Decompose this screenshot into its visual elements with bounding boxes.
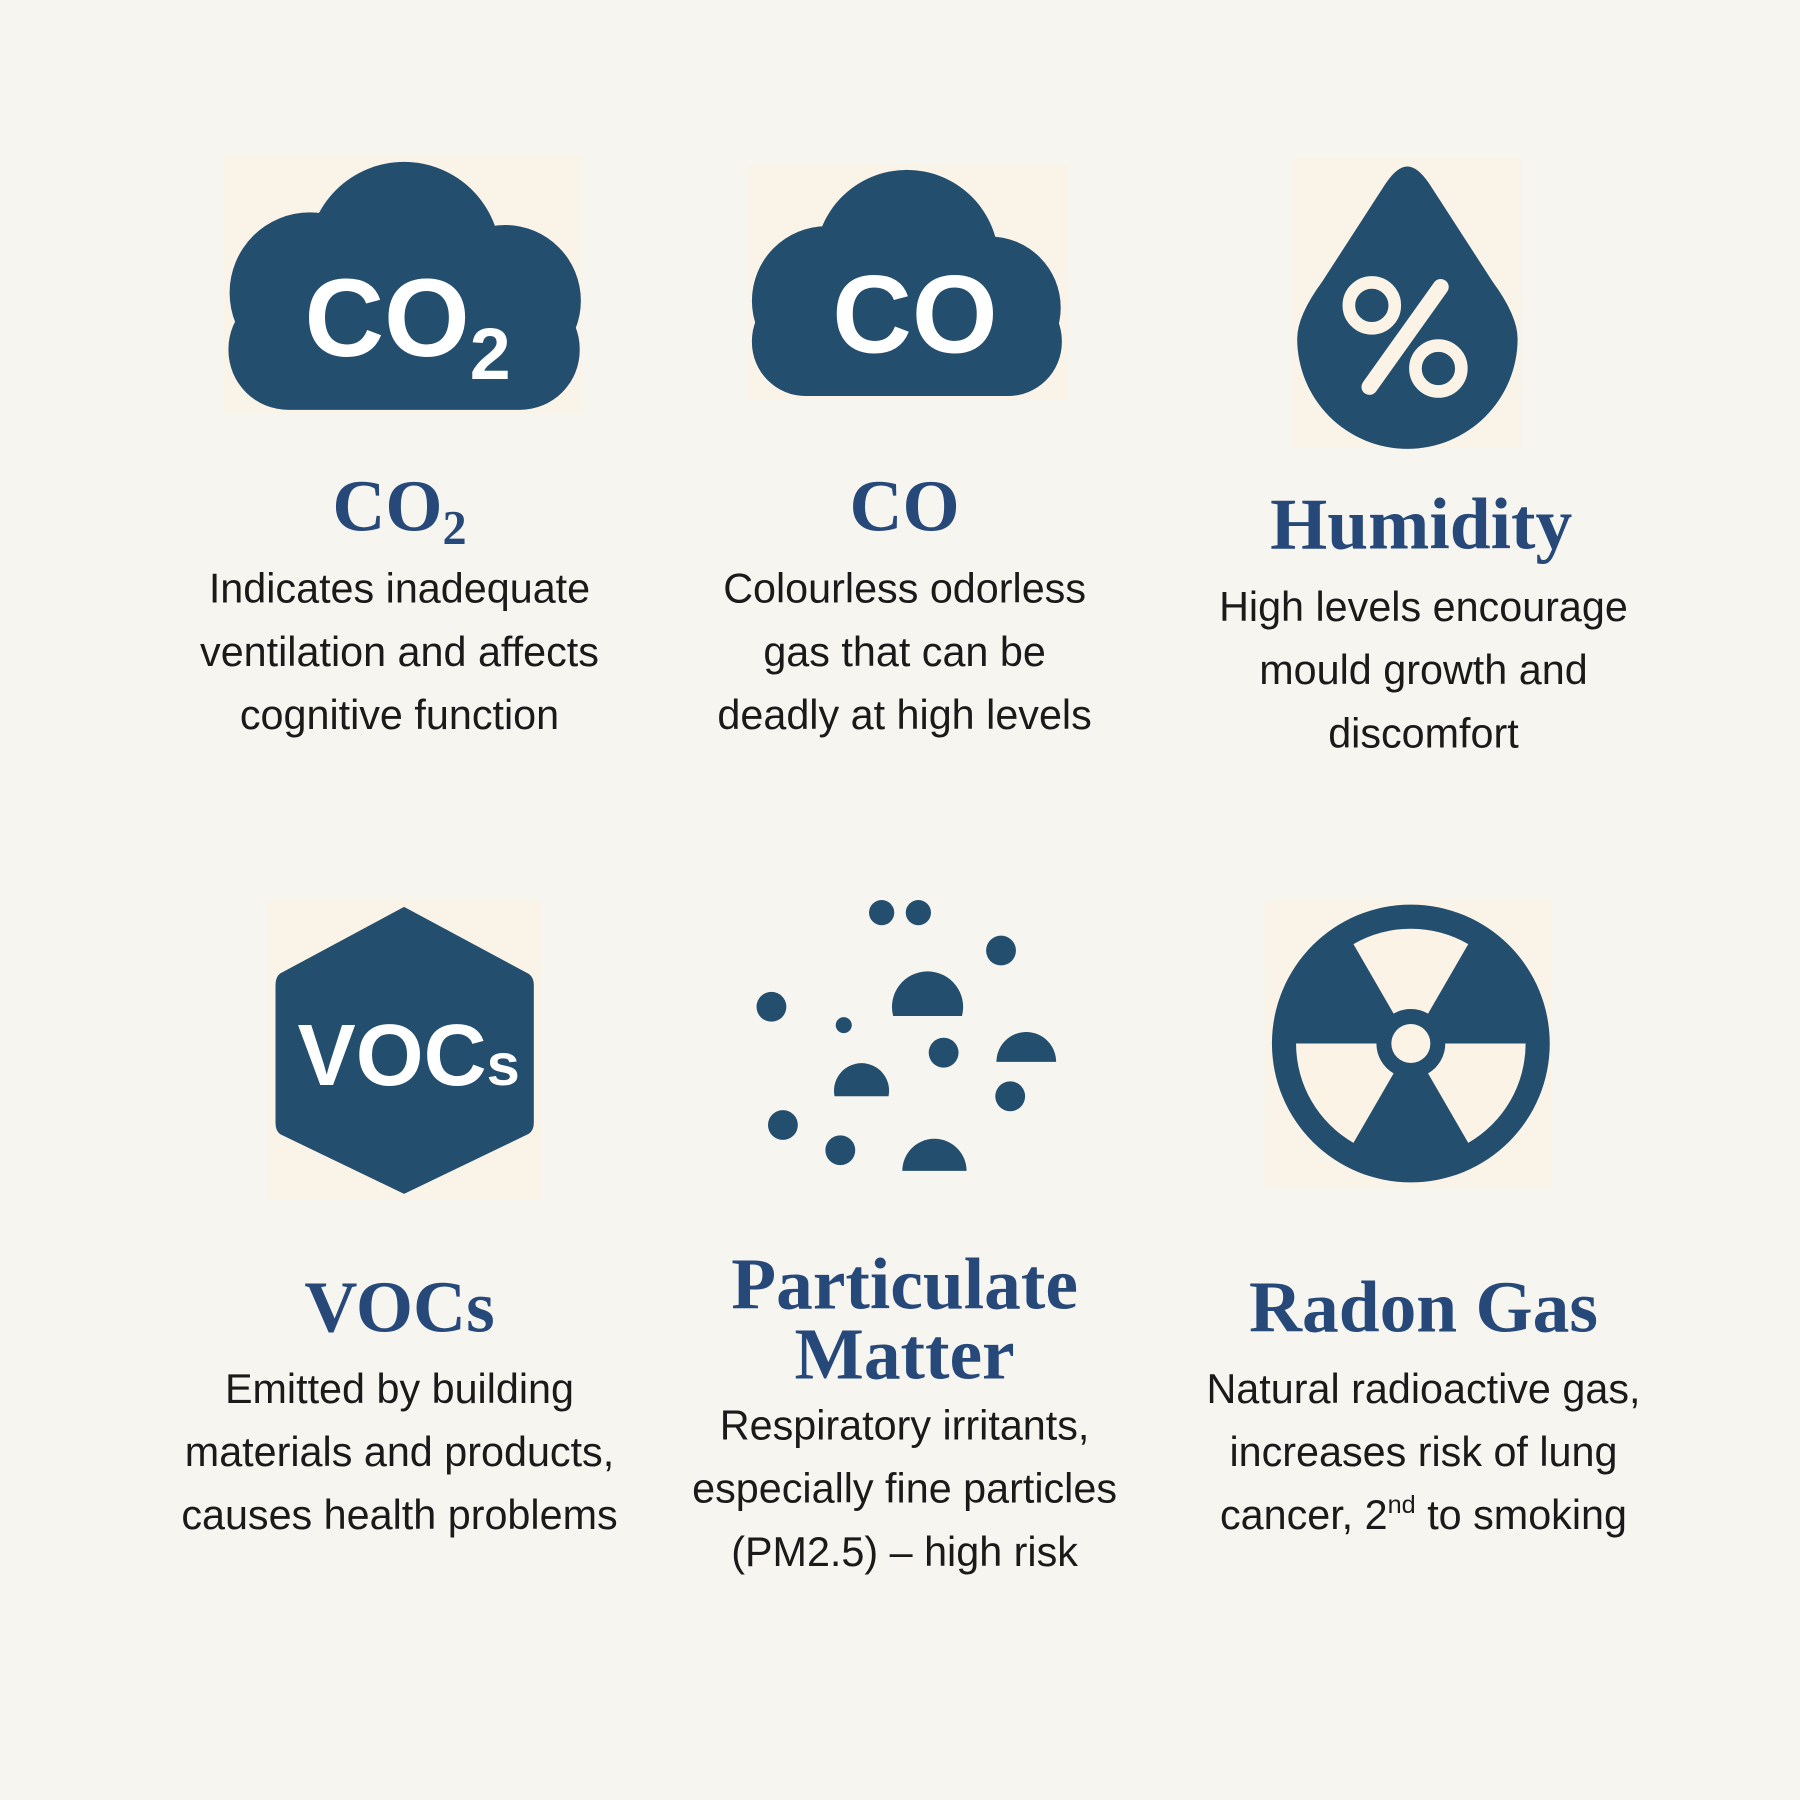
- text: Radon description: increases risk of lung: [1229, 1429, 1618, 1475]
- text: Humidity description: mould growth and: [1259, 647, 1588, 693]
- icon: CO cloud: [748, 164, 1068, 399]
- text: CO2 description: ventilation and affects: [200, 629, 599, 675]
- heading: Particulate Matter: Particulate: [731, 1244, 1078, 1325]
- heading: Radon Gas: Radon Gas: [1249, 1267, 1598, 1348]
- icon: particles: [757, 900, 1056, 1171]
- heading: Particulate Matter: Matter: [794, 1314, 1015, 1395]
- text: Humidity description: discomfort: [1328, 710, 1519, 756]
- icon: CO2 cloud: 2: [470, 312, 511, 395]
- text: Particulate Matter description: (PM2.5) – high risk: [731, 1529, 1078, 1575]
- text: VOCs description: causes health problems: [181, 1492, 618, 1538]
- heading: VOCs: VOCs: [304, 1267, 495, 1348]
- icon: VOCs hexagon: [267, 899, 541, 1200]
- panel: Particulate Matter: [692, 900, 1117, 1575]
- icon: CO2 cloud: CO: [304, 257, 470, 380]
- panel: Radon Gas: [1206, 899, 1640, 1538]
- icon: CO2 cloud: [224, 155, 582, 413]
- panel: Humidity: [1219, 158, 1628, 756]
- icon: water drop: [1293, 158, 1522, 449]
- text: CO2 description: cognitive function: [240, 692, 559, 738]
- text: VOCs description: materials and products,: [185, 1429, 614, 1475]
- panel: CO2: [200, 155, 599, 738]
- text: VOCs description: Emitted by building: [225, 1366, 574, 1412]
- icon: VOCs hexagon: VOCs: [298, 1007, 520, 1104]
- text: Radon description: to smoking: [1416, 1492, 1627, 1538]
- panel: CO: [717, 164, 1092, 738]
- heading: CO2: CO: [332, 465, 443, 546]
- text: CO description: Colourless odorless: [723, 566, 1086, 612]
- heading: CO2: 2: [443, 502, 467, 555]
- heading: Humidity: Humidity: [1270, 484, 1572, 565]
- text: Particulate Matter description: Respiratory irritants,: [720, 1403, 1089, 1449]
- text: Radon description: nd: [1388, 1491, 1416, 1519]
- icon: radiation symbol: [1265, 899, 1552, 1188]
- text: CO2 description: Indicates inadequate: [209, 566, 590, 612]
- text: Radon description: Natural radioactive gas,: [1206, 1366, 1640, 1412]
- text: CO description: gas that can be: [763, 629, 1046, 675]
- icon: CO cloud: CO: [832, 253, 998, 376]
- heading: CO: CO: [849, 465, 960, 546]
- text: CO description: deadly at high levels: [717, 692, 1092, 738]
- text: Particulate Matter description: especially fine particles: [692, 1466, 1117, 1512]
- text: Radon description: cancer, 2: [1220, 1491, 1627, 1538]
- panel: VOCs: [181, 899, 618, 1538]
- text: Humidity description: High levels encourage: [1219, 584, 1628, 630]
